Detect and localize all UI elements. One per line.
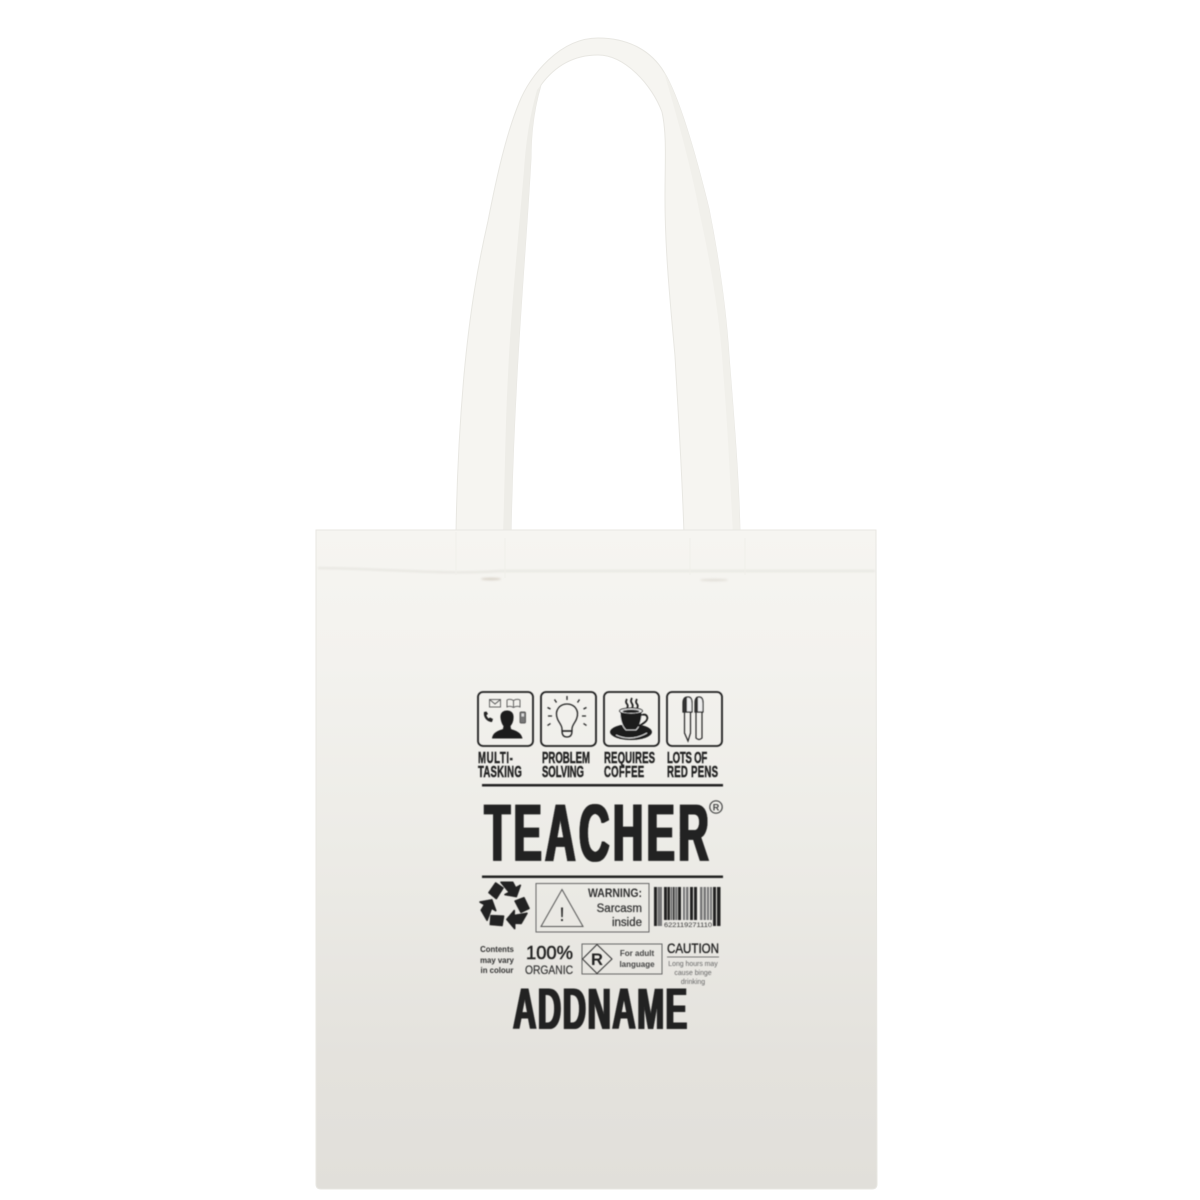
- warning text: inside: [612, 917, 642, 929]
- contents note: Contents: [480, 945, 515, 954]
- icon labels: LOTS OF: [667, 748, 707, 767]
- icon labels: RED PENS: [667, 762, 718, 781]
- icon labels: SOLVING: [542, 762, 584, 781]
- registered mark: R: [713, 802, 720, 812]
- icon labels: MULTI-: [478, 748, 513, 767]
- 100% organic: [525, 942, 573, 977]
- top rule: [482, 784, 723, 786]
- printed label artwork: [477, 692, 723, 1041]
- barcode: [654, 887, 720, 929]
- rating diamond: R: [591, 951, 603, 969]
- registered mark: [710, 801, 722, 813]
- tote bag body: [316, 530, 877, 1189]
- warning triangle: !: [559, 905, 565, 926]
- handle attachment stitching: [456, 532, 745, 578]
- 100% organic: 100%: [526, 942, 573, 963]
- adult language box: language: [619, 960, 655, 969]
- title: TEACHER: TEACHER: [484, 788, 709, 878]
- warning box: [536, 884, 649, 932]
- top hem stitching: [318, 568, 875, 572]
- handle fold left: [503, 85, 541, 534]
- icon labels: COFFEE: [604, 762, 644, 781]
- contents note: in colour: [481, 966, 513, 975]
- caution note: cause binge: [674, 970, 712, 977]
- bottom edge shadow: [320, 1187, 873, 1189]
- icon labels: PROBLEM: [542, 748, 590, 767]
- barcode: 622119271110: [664, 922, 712, 929]
- adult language box: For adult: [620, 949, 654, 958]
- handle fold right: [664, 72, 740, 534]
- contents note: [480, 945, 515, 975]
- icon labels: [478, 748, 718, 781]
- adult language box: [582, 944, 662, 974]
- caution note: Long hours may: [668, 961, 718, 968]
- warning text: Sarcasm: [597, 903, 642, 915]
- icon: light bulb: [541, 692, 596, 746]
- icon: multi-tasking: [478, 692, 533, 746]
- caution note: CAUTION: [667, 941, 719, 956]
- icon: pens: [667, 692, 722, 746]
- contents note: may vary: [480, 956, 515, 965]
- caution note: drinking: [681, 979, 705, 986]
- fold marks under handles: [481, 578, 728, 581]
- icon: coffee cup: [604, 692, 659, 746]
- warning text: WARNING:: [588, 888, 642, 900]
- tote bag handle: [456, 38, 740, 534]
- bottom rule: [482, 876, 723, 878]
- name: ADDNAME: ADDNAME: [513, 976, 687, 1041]
- icon labels: REQUIRES: [604, 748, 655, 767]
- icon labels: TASKING: [478, 762, 522, 781]
- warning text: [588, 888, 642, 929]
- 100% organic: ORGANIC: [525, 965, 573, 977]
- caution note: [667, 941, 719, 986]
- icon: recycle: [477, 882, 533, 931]
